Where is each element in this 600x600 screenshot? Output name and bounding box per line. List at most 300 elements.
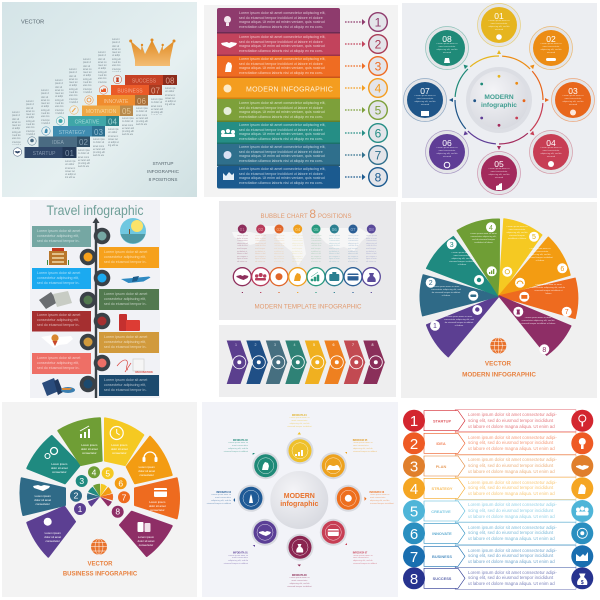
number 7 with arrow (345, 146, 387, 164)
step 1 startup: 01 (65, 149, 74, 158)
number 7 with arrow: 7 (375, 148, 382, 162)
circle 01: 01 (494, 11, 504, 21)
segment 2: Lorem ipsum (35, 494, 51, 498)
number 1 with arrow: 1 (375, 16, 382, 30)
step 8 success (113, 75, 177, 86)
numbered dots: 3 (79, 476, 84, 486)
box orange: sed do eiusmod tempor in- (104, 260, 147, 264)
panel: chevrons (219, 325, 396, 397)
bubble 8 (362, 224, 380, 293)
box dark red: Lorem ipsum dolor sit amet (37, 313, 80, 317)
row 6 innovate: INNOVATE (432, 531, 452, 536)
circle 02: 02 (546, 34, 556, 44)
icon: globe (490, 338, 506, 354)
panel: travel infographic (30, 200, 160, 398)
node 3: INFODATA 03 (233, 439, 248, 442)
step 8 success: SUCCESS (132, 78, 157, 84)
box teal: consectetur adipiscing elit, (37, 234, 79, 238)
row 5 creative: ut labore et dolore magna aliqua. Ut enim ad (468, 514, 555, 519)
step 1 startup: STARTUP (33, 151, 56, 157)
chevron 1 (227, 340, 248, 384)
step 4 creative: CREATIVE (75, 120, 100, 126)
band 8: exercitation ullamco laboris nisi ut aliquip ex ea com- (239, 181, 323, 185)
icon: money and tickets (39, 291, 72, 309)
band 8: Lorem ipsum dolor sit amet consectetur adipiscing elit, (239, 167, 326, 171)
heading: BUBBLE CHART 8 POSITIONS (260, 207, 352, 221)
row 2 idea (403, 432, 593, 454)
band 4 title (217, 78, 340, 99)
band 6: Lorem ipsum dolor sit amet consectetur adipiscing elit, (239, 123, 326, 127)
caption (63, 561, 138, 578)
box navy (99, 375, 159, 396)
centre disc: MODERN (284, 493, 315, 500)
caption: VECTOR (88, 561, 113, 567)
segment 4 (58, 418, 102, 465)
row 2 idea: 2 (410, 436, 418, 453)
small pie (87, 484, 113, 507)
node 3: Lorem ipsum dolor sit amet consectetur adipiscing elit, sed do eiusmod tempor incididunt (224, 442, 248, 453)
row 6 innovate: scing elit, sed do eiusmod tempor incididunt (468, 530, 553, 535)
sector 5: 5 (532, 234, 536, 241)
segment 4: consectetur (82, 451, 97, 455)
band 3: exercitation ullamco laboris nisi ut aliquip ex ea com- (239, 71, 323, 75)
node 7: INFODATA 07 (353, 552, 368, 554)
node 2 (206, 485, 264, 512)
box tan: consectetur adipiscing elit, (104, 340, 146, 344)
row 8 success: Lorem ipsum dolor sit amet consectetur adipi- (468, 570, 557, 575)
box blue: sed do eiusmod tempor in- (37, 281, 80, 285)
chevron 3: 3 (274, 343, 276, 347)
panel: startup stairs (2, 2, 197, 197)
row 1 startup: scing elit, sed do eiusmod tempor incididunt (468, 418, 553, 423)
timeline arrow (92, 218, 100, 398)
title: Travel infographic (46, 202, 144, 218)
caption: VECTOR (485, 360, 512, 368)
node 1: INFODATA 01 (233, 552, 248, 554)
row 6 innovate: Lorem ipsum dolor sit amet consectetur adipi- (468, 525, 557, 530)
row 7 business (403, 545, 593, 567)
circle 08: 08 (442, 34, 452, 44)
step 4 creative (56, 116, 119, 126)
segment 6: dolor sit amet (138, 469, 155, 473)
box coral: Lorem ipsum dolor sit amet (37, 356, 80, 360)
band 5: sed do eiusmod tempor incididunt ut labore et dolore (239, 106, 323, 110)
footer heading: MODERN TEMPLATE INFOGRAPHIC (254, 304, 362, 310)
step 5 motivation: 05 (122, 107, 131, 116)
box green: Lorem ipsum dolor sit amet (104, 292, 147, 296)
chevron 6 (324, 340, 346, 384)
box orange: consectetur adipiscing elit, (104, 255, 146, 259)
number 5 with arrow: 5 (375, 104, 382, 118)
row 7 business: 7 (410, 549, 418, 566)
bubble 6 (325, 224, 343, 293)
band 7: exercitation ullamco laboris nisi ut aliquip ex ea com- (239, 159, 323, 163)
band 2 (217, 34, 340, 56)
centre plate (466, 67, 532, 133)
number 2 with arrow: 2 (375, 38, 382, 52)
icon: vaccination (117, 359, 153, 374)
icon: crown (129, 38, 176, 66)
step 7 business: BUSINESS (117, 88, 143, 94)
panel: radial modern infographic (202, 402, 398, 597)
band 1: Lorem ipsum dolor sit amet consectetur adipiscing elit, (239, 11, 326, 15)
row 7 business: Lorem ipsum dolor sit amet consectetur adipi- (468, 548, 557, 553)
step 3 strategy: STRATEGY (59, 130, 86, 136)
row 6 innovate (403, 522, 593, 544)
panel: numbered list (400, 400, 600, 600)
circle 08 (426, 26, 468, 70)
band 6: exercitation ullamco laboris nisi ut aliquip ex ea com- (239, 137, 323, 141)
row 5 creative: Lorem ipsum dolor sit amet consectetur adipi- (468, 502, 557, 507)
row 4 strategy: ut labore et dolore magna aliqua. Ut enim ad (468, 491, 555, 496)
text columns above steps (12, 38, 121, 145)
band 8 (217, 166, 340, 188)
box coral: consectetur adipiscing elit, (37, 361, 79, 365)
number 8 with arrow (345, 168, 387, 186)
box navy: sed do eiusmod tempor in- (104, 388, 147, 392)
icon: hotel (47, 248, 69, 265)
segment 8: Lorem ipsum (138, 535, 155, 539)
band 7: magna aliqua. Ut enim ad minim veniam, quis nostrud (239, 154, 325, 158)
timeline wheels (80, 228, 110, 392)
circle 03 (552, 78, 594, 122)
world map background (232, 226, 372, 266)
cycle arrows (449, 50, 549, 150)
circle 02 (530, 26, 572, 70)
row 1 startup: Lorem ipsum dolor sit amet consectetur adipi- (468, 412, 557, 417)
segment 4: Lorem ipsum (81, 443, 98, 447)
row 2 idea: Lorem ipsum dolor sit amet consectetur adipi- (468, 435, 557, 440)
chevron 1: 1 (235, 343, 237, 347)
band 3 (217, 56, 340, 78)
step 2 idea (28, 136, 90, 147)
chevron 5: 5 (313, 343, 315, 347)
box orange: Lorem ipsum dolor sit amet (104, 250, 147, 254)
centre plate: infographic (481, 102, 517, 109)
row 5 creative: 5 (410, 504, 418, 520)
bubble 5 (307, 224, 325, 293)
step 1 startup (13, 147, 77, 158)
icon: passports (42, 378, 75, 396)
segment 5: consectetur (112, 451, 127, 455)
chevron 2: 2 (254, 343, 256, 347)
row 1 startup (403, 410, 593, 432)
segment 6: consectetur (139, 473, 154, 477)
sector 4: 4 (489, 225, 493, 232)
sector 1 (427, 296, 499, 357)
row 2 idea: scing elit, sed do eiusmod tempor incididunt (468, 440, 553, 445)
box blue (32, 268, 91, 289)
row 4 strategy: 4 (410, 481, 418, 498)
icon: airplane (121, 276, 150, 283)
chevron 7: 7 (352, 343, 354, 347)
node 3 (223, 439, 279, 479)
step 3 strategy (42, 126, 105, 137)
step 2 idea: 02 (79, 138, 88, 147)
row 3 plan: scing elit, sed do eiusmod tempor incididunt (468, 463, 553, 468)
chevron 3 (266, 340, 287, 384)
box tan (99, 332, 159, 353)
caption (462, 360, 536, 378)
circle 03: 03 (568, 86, 578, 96)
band 2: magna aliqua. Ut enim ad minim veniam, quis nostrud (239, 44, 325, 48)
number 4 with arrow: 4 (375, 82, 382, 96)
segment 1: dolor sit amet (44, 535, 61, 539)
step 5 motivation: MOTIVATION (86, 109, 117, 115)
band 7: Lorem ipsum dolor sit amet consectetur adipiscing elit, (239, 145, 326, 149)
sector 3: Lorem ipsum dolor sit amet consectetur adipiscing elit, sed do eiusmod tempor incididunt ut labore (449, 252, 475, 266)
segment 7 (135, 478, 179, 518)
chevron 2 (246, 340, 268, 384)
row 2 idea: IDEA (436, 441, 446, 446)
node 8: Lorem ipsum dolor sit amet consectetur adipiscing elit, sed do eiusmod tempor incididunt (287, 577, 312, 588)
chevron 4: 4 (294, 343, 296, 347)
row 2 idea: ut labore et dolore magna aliqua. Ut enim ad (468, 446, 555, 451)
sector 7 (499, 278, 578, 318)
sector 5 (499, 219, 542, 296)
row 1 startup: 1 (410, 413, 418, 430)
band 5: Lorem ipsum dolor sit amet consectetur adipiscing elit, (239, 101, 326, 105)
sector 7: Lorem ipsum dolor sit amet consectetur adipiscing elit, sed do eiusmod tempor incididunt ut labore (532, 284, 565, 295)
row 8 success (403, 567, 593, 589)
bubble 6: 06 (332, 227, 337, 232)
bubble 7: 07 (350, 227, 356, 232)
step 2 idea: IDEA (52, 140, 64, 146)
segment 3 (27, 436, 80, 483)
centre plate: MODERN (484, 94, 514, 101)
row 8 success: scing elit, sed do eiusmod tempor incididunt (468, 575, 553, 580)
chevron 7 (344, 340, 365, 384)
segment 5 (105, 418, 143, 465)
node 5 (320, 439, 378, 479)
bubble 3: 03 (276, 227, 282, 232)
segment 3: consectetur (52, 470, 67, 474)
sector 8: Lorem ipsum dolor sit amet consectetur adipiscing elit, sed do eiusmod tempor incididunt ut labore (521, 317, 555, 325)
box blue: consectetur adipiscing elit, (37, 276, 79, 280)
row 3 plan: PLAN (436, 464, 446, 469)
icon: sun and sea (120, 218, 146, 244)
node 5: INFODATA 05 (353, 439, 368, 442)
row 7 business: BUSINESS (432, 554, 452, 559)
row 4 strategy: Lorem ipsum dolor sit amet consectetur adipi- (468, 480, 557, 485)
box green: sed do eiusmod tempor in- (104, 302, 147, 306)
row 3 plan: ut labore et dolore magna aliqua. Ut enim ad (468, 469, 555, 474)
row 8 success: $ (581, 580, 584, 586)
bubble 4 (289, 224, 307, 293)
caption: BUSINESS INFOGRAPHIC (63, 572, 138, 578)
segment 1 (27, 507, 75, 557)
bubble 1 (233, 224, 251, 293)
icon: globe (91, 539, 107, 555)
step 7 business: 07 (151, 86, 160, 96)
bubble 4: 04 (295, 227, 301, 232)
band 7 (217, 144, 340, 166)
node 4 (286, 414, 314, 464)
row 4 strategy (403, 477, 593, 499)
node 1: Lorem ipsum dolor sit amet consectetur adipiscing elit, sed do eiusmod tempor incididunt (224, 554, 248, 565)
bubble 2 (252, 224, 270, 293)
band 6: magna aliqua. Ut enim ad minim veniam, quis nostrud (239, 132, 325, 136)
row 4 strategy: scing elit, sed do eiusmod tempor incididunt (468, 485, 553, 490)
row 8 success: 8 (410, 571, 418, 588)
row 6 innovate: 6 (410, 526, 418, 543)
numbered dots (70, 466, 130, 518)
box coral (32, 353, 91, 374)
box dark red (32, 311, 91, 332)
circle 05 (478, 152, 520, 194)
number 8 with arrow: 8 (375, 170, 382, 184)
band 1: exercitation ullamco laboris nisi ut aliquip ex ea com- (239, 25, 323, 29)
centre disc: infographic (280, 501, 318, 508)
band 2: sed do eiusmod tempor incididunt ut labore et dolore (239, 40, 323, 44)
numbered dots: 1 (78, 504, 83, 514)
row 5 creative: CREATIVE (431, 509, 451, 514)
number 1 with arrow (345, 13, 387, 31)
caption: startup infographic: INFOGRAPHIC (147, 169, 180, 174)
step 6 innovate (85, 95, 148, 106)
sector 6: Lorem ipsum dolor sit amet consectetur adipiscing elit, sed do eiusmod tempor incididunt ut labore (527, 248, 553, 262)
chevron 8: 8 (372, 343, 374, 347)
sector 8: 8 (542, 347, 546, 354)
segment 8: dolor sit amet (138, 539, 155, 543)
number 3 with arrow: 3 (375, 60, 382, 74)
heading: vector: VECTOR (21, 20, 44, 26)
numbered dots: 4 (92, 467, 97, 477)
sector 6: 6 (560, 266, 564, 273)
number 6 with arrow: 6 (375, 126, 382, 140)
band 5: exercitation ullamco laboris nisi ut aliquip ex ea com- (239, 115, 323, 119)
row 8 success: ut labore et dolore magna aliqua. Ut enim ad (468, 581, 555, 586)
segment 1: consectetur (45, 539, 60, 543)
segment 6: Lorem ipsum (139, 465, 155, 469)
node 8: INFODATA 08 (292, 574, 307, 577)
box green: consectetur adipiscing elit, (104, 297, 146, 301)
step 5 motivation (70, 106, 133, 116)
row 8 success: SUCCESS (433, 576, 452, 581)
segment 5: dolor sit amet (111, 447, 128, 451)
band 3: Lorem ipsum dolor sit amet consectetur adipiscing elit, (239, 57, 326, 61)
band 5: magna aliqua. Ut enim ad minim veniam, quis nostrud (239, 110, 325, 114)
numbered dots: 6 (118, 478, 123, 488)
bubble 8: 08 (369, 227, 374, 232)
sector 6 (499, 237, 570, 296)
segment 3: dolor sit amet (51, 466, 68, 470)
bubble 2: 02 (258, 227, 264, 232)
segment 7: Lorem ipsum (149, 500, 166, 504)
circle 05: 05 (494, 159, 504, 169)
icon: suitcases (119, 314, 140, 331)
node 7 (320, 519, 378, 566)
row 7 business: ut labore et dolore magna aliqua. Ut enim ad (468, 559, 555, 564)
sector 4 (457, 219, 499, 296)
segment 2: dolor sit amet (34, 498, 51, 502)
bubble 1: 01 (240, 227, 245, 232)
segment 8 (120, 512, 172, 556)
circle 04: 04 (546, 138, 556, 148)
bubble 3 (270, 224, 288, 293)
band 7: sed do eiusmod tempor incididunt ut labore et dolore (239, 150, 323, 154)
band 5 (217, 99, 340, 122)
circle 01 (478, 4, 520, 46)
panel: business fan (2, 402, 197, 597)
node 6: INFODATA 06 (370, 491, 385, 494)
row 4 strategy: STRATEGY (432, 486, 453, 491)
box teal: sed do eiusmod tempor in- (37, 239, 80, 243)
step 8 success: 08 (166, 76, 175, 86)
numbered dots: 8 (115, 507, 120, 517)
segment 3: Lorem ipsum (51, 462, 68, 466)
node 6: Lorem ipsum dolor sit amet consectetur adipiscing elit, sed do eiusmod tempor incididunt (370, 494, 394, 505)
row 5 creative (403, 500, 593, 522)
sector 4: Lorem ipsum dolor sit amet consectetur adipiscing elit, sed do eiusmod tempor incididunt ut labore (470, 233, 497, 244)
segment 4: dolor sit amet (81, 447, 98, 451)
box tan: sed do eiusmod tempor in- (104, 345, 147, 349)
panel: stacked bands (204, 5, 398, 197)
box green (99, 289, 159, 310)
circle 04 (530, 130, 572, 174)
chevron 6: 6 (332, 343, 334, 347)
text columns below steps (65, 87, 176, 178)
node 5: Lorem ipsum dolor sit amet consectetur adipiscing elit, sed do eiusmod tempor incididunt (353, 442, 377, 453)
numbered dots: 2 (74, 491, 79, 501)
box tan: Lorem ipsum dolor sit amet (104, 335, 147, 339)
numbered dots: 7 (122, 492, 127, 502)
sector 3: 3 (450, 242, 454, 249)
band 1: magna aliqua. Ut enim ad minim veniam, quis nostrud (239, 20, 325, 24)
box navy: Lorem ipsum dolor sit amet (104, 378, 147, 382)
box dark red: consectetur adipiscing elit, (37, 318, 79, 322)
box dark red: sed do eiusmod tempor in- (37, 323, 80, 327)
row 1 startup: STARTUP (433, 418, 451, 424)
number 5 with arrow (345, 101, 387, 119)
circle 06 (426, 130, 468, 174)
node 7: Lorem ipsum dolor sit amet consectetur adipiscing elit, sed do eiusmod tempor incididunt (353, 554, 377, 565)
segment 8: consectetur (139, 543, 153, 547)
box blue: Lorem ipsum dolor sit amet (37, 271, 80, 275)
number 6 with arrow (345, 124, 387, 142)
segment 7: consectetur (150, 508, 165, 512)
sector 1: 1 (433, 323, 437, 330)
segment 1: Lorem ipsum (45, 531, 61, 535)
node 2: INFODATA 02 (216, 491, 232, 494)
sector 5: Lorem ipsum dolor sit amet consectetur adipiscing elit, sed do eiusmod tempor incididunt ut labore (507, 226, 527, 240)
segment 2 (20, 478, 65, 515)
band 3: sed do eiusmod tempor incididunt ut labore et dolore (239, 62, 323, 66)
panel: circular cycle (402, 3, 597, 198)
sector 1: Lorem ipsum dolor sit amet consectetur adipiscing elit, sed do eiusmod tempor incididunt ut labore (444, 316, 474, 327)
circle 06: 06 (442, 138, 452, 148)
sector 2: Lorem ipsum dolor sit amet consectetur adipiscing elit, sed do eiusmod tempor incididunt ut labore (431, 286, 461, 297)
band 6 (217, 122, 340, 144)
segment 7: dolor sit amet (149, 504, 166, 508)
step 3 strategy: 03 (94, 128, 103, 137)
row 7 business: scing elit, sed do eiusmod tempor incididunt (468, 553, 553, 558)
segment 2: consectetur (35, 502, 50, 506)
chevron 4 (285, 340, 307, 384)
box coral: sed do eiusmod tempor in- (37, 366, 80, 370)
circle 07: 07 (420, 86, 430, 96)
caption: MODERN INFOGRAPHIC (462, 372, 536, 378)
row 3 plan (403, 455, 593, 477)
node 2: Lorem ipsum dolor sit amet consectetur adipiscing elit, sed do eiusmod tempor incididunt (207, 494, 231, 505)
step 4 creative: 04 (108, 118, 117, 126)
box navy: consectetur adipiscing elit, (104, 383, 146, 387)
band 4 title: MODERN INFOGRAPHIC (246, 86, 333, 94)
sector 7: 7 (565, 309, 569, 316)
band 2: exercitation ullamco laboris nisi ut aliquip ex ea com- (239, 49, 323, 53)
bubble 7 (344, 224, 362, 293)
caption: startup infographic: 8 POSITIONS (149, 177, 177, 182)
